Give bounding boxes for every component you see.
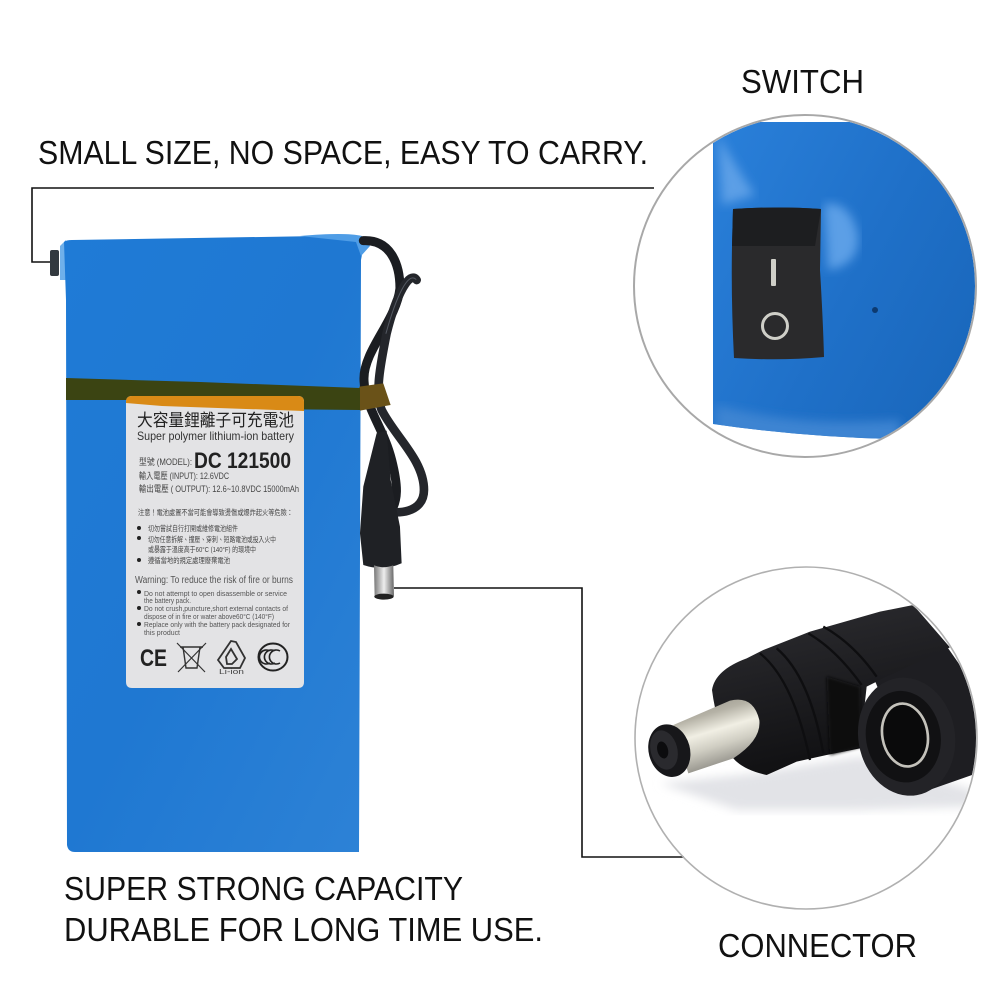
heading: connector: CONNECTOR: [718, 927, 917, 964]
product label: [126, 396, 304, 688]
label model: 輸出電壓 ( OUTPUT): 12.6~10.8VDC 15000mAh: [139, 483, 299, 494]
adhesive tape band: [66, 378, 360, 410]
heading: capacity and durability: DURABLE FOR LONG TIME USE.: [64, 911, 543, 948]
metal barrel: [673, 700, 759, 773]
heading: small size: SMALL SIZE, NO SPACE, EASY TO CARRY.: [38, 134, 648, 171]
icon: CCC mark: [258, 644, 288, 670]
on mark: [771, 259, 776, 286]
plug shading: [827, 677, 862, 755]
label model: [139, 448, 299, 494]
circle outline: [635, 567, 977, 909]
plug body: [712, 605, 950, 775]
circle outline: [634, 115, 976, 457]
label English warnings: [135, 575, 293, 637]
label model: 輸入電壓 (INPUT): 12.6VDC: [139, 470, 229, 481]
callout line: connector: [394, 588, 684, 857]
blue casing: [713, 122, 990, 439]
label English warnings: the battery pack.: [144, 596, 191, 605]
icon: recycling Li-ion: [218, 641, 245, 676]
rocker switch: [732, 208, 824, 359]
casing highlights: [716, 135, 900, 445]
label sheet: [126, 396, 304, 688]
icon: crossed-out bin: [177, 643, 206, 672]
battery switch knob: [50, 250, 59, 276]
socket: [858, 687, 941, 796]
small hole: [872, 307, 878, 313]
battery top flap: [300, 234, 370, 256]
label Chinese warnings: 切勿嘗試自行打開或維修電池組件: [148, 523, 238, 533]
cable tape: [359, 383, 391, 411]
label English warnings: dispose of in fire or water above60°C (140°F): [144, 612, 274, 621]
DC plug strain relief: [360, 431, 402, 568]
plug ribs: [760, 627, 877, 760]
callout line: switch: [32, 188, 654, 262]
DC plug barrel: [374, 565, 394, 599]
power cable: [359, 241, 424, 600]
off mark: [762, 314, 788, 338]
label English warnings: Do not attempt to open disassemble or service: [144, 589, 287, 598]
panel: switch close-up: [634, 115, 990, 457]
icon: CE mark: CE: [140, 645, 167, 672]
battery side edge: [60, 240, 66, 280]
label Chinese warnings: 或暴露于溫度高于60°C (140°F) 的環境中: [148, 544, 256, 554]
label English warnings: this product: [144, 628, 180, 637]
DC plug tip: [374, 594, 394, 600]
label Chinese warnings: [137, 507, 293, 565]
label subtitle: Super polymer lithium-ion battery: [137, 429, 294, 443]
socket cable: [876, 648, 976, 790]
label Chinese warnings: 遵循當地的規定處理廢棄電池: [148, 555, 230, 565]
label Chinese warnings: 注意！電池處置不當可能會導致燙傷或爆炸起火等危險：: [138, 507, 293, 517]
battery body: [64, 235, 365, 852]
label model: 型號 (MODEL):: [139, 456, 192, 467]
barrel tip: [648, 724, 690, 777]
label title: 大容量鋰離子可充電池: [137, 411, 294, 430]
battery pack: [50, 234, 424, 852]
label tape overlay: [126, 396, 304, 411]
label English warnings: Replace only with the battery pack designated for: [144, 620, 290, 629]
panel: connector close-up: [635, 567, 987, 909]
circle background: [635, 116, 975, 456]
heading: capacity and durability: [64, 870, 543, 948]
shadow under plug: [660, 757, 973, 810]
label English warnings: Do not crush,puncture,short external contacts of: [144, 604, 289, 613]
heading: capacity and durability: SUPER STRONG CAPACITY: [64, 870, 463, 907]
label model: DC 121500: [194, 448, 291, 473]
icon: recycling Li-ion: Li-ion: [219, 669, 244, 676]
label English warnings: Warning: To reduce the risk of fire or burns: [135, 575, 293, 586]
label Chinese warnings: 切勿任意拆解、撞壓、穿刺、短路電池或投入火中: [148, 534, 276, 544]
heading: switch: SWITCH: [741, 63, 864, 100]
circle background: [636, 568, 976, 908]
